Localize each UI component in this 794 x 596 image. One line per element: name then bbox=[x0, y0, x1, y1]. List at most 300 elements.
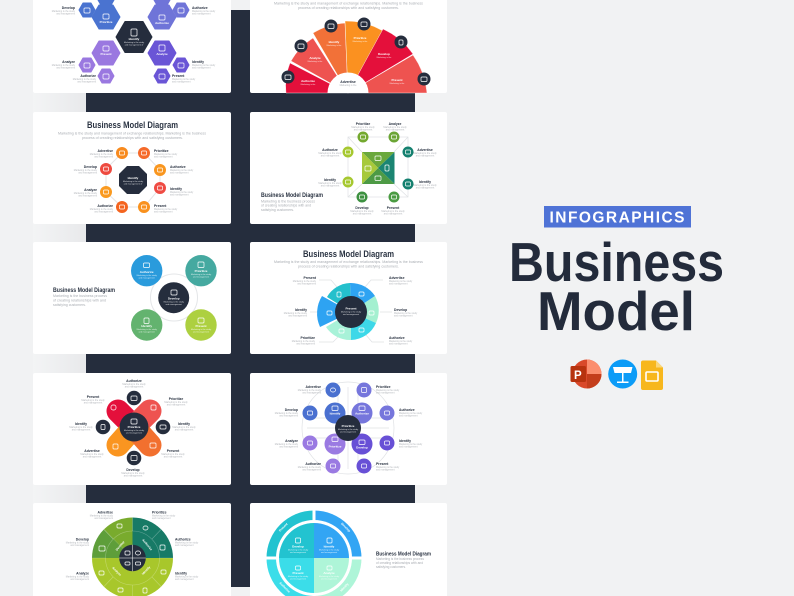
octagon labels: Marketing is the study bbox=[90, 153, 114, 156]
description: Marketing is the study and management of exchange relationships. Marketing is the business bbox=[58, 132, 206, 136]
square nodes bbox=[342, 132, 414, 202]
octagon labels: Advertise bbox=[98, 149, 113, 153]
petals bbox=[111, 405, 156, 449]
octagon labels bbox=[74, 149, 194, 214]
square labels: Marketing is the study bbox=[381, 210, 405, 213]
square labels: Advertise bbox=[417, 148, 433, 152]
petal labels: Marketing is the study bbox=[121, 472, 145, 475]
square labels: Present bbox=[387, 206, 400, 210]
wheel labels: Marketing is the study bbox=[66, 576, 90, 578]
outer ring quadrants: Present bbox=[278, 522, 289, 533]
petal labels: Develop bbox=[126, 468, 140, 472]
green square bbox=[362, 152, 394, 184]
petal centre: and management bbox=[126, 432, 143, 434]
fan labels: Marketing is the bbox=[308, 60, 323, 63]
network labels: Marketing is the study bbox=[399, 443, 423, 446]
network labels: Analyze bbox=[285, 439, 298, 443]
octagon nodes bbox=[100, 147, 166, 213]
wheel: Identify bbox=[141, 565, 151, 576]
square labels bbox=[318, 122, 437, 216]
petal centre: Prioritize bbox=[128, 425, 141, 429]
heading and description: satisfying customers. bbox=[261, 208, 294, 212]
octagon labels: and management bbox=[170, 172, 189, 174]
fan segments bbox=[286, 21, 427, 93]
octagon labels: Identify bbox=[170, 187, 182, 191]
wheel labels: Marketing is the study bbox=[152, 514, 176, 518]
heading and description: satisfying customers. bbox=[53, 303, 86, 307]
square labels: Marketing is the study bbox=[413, 184, 437, 187]
heading: Business Model Diagram bbox=[87, 120, 178, 130]
outer nodes bbox=[302, 382, 394, 474]
network labels: Marketing is the study bbox=[376, 466, 400, 469]
fan centre bbox=[327, 72, 368, 93]
wheel labels: and management bbox=[94, 517, 113, 520]
network labels: Present bbox=[376, 462, 389, 466]
inner quadrants bbox=[279, 523, 349, 593]
ring labels: and management bbox=[297, 282, 316, 286]
network centre: Marketing is the study bbox=[338, 428, 359, 431]
octagon labels: and management bbox=[170, 194, 189, 196]
inner quadrants: Marketing is the study bbox=[319, 575, 340, 578]
heading and description: of creating relationships with and bbox=[53, 298, 106, 302]
ring labels: and management bbox=[288, 314, 307, 318]
inner quadrants: and management bbox=[290, 578, 307, 580]
outer ring quadrants bbox=[262, 505, 366, 596]
square labels: Identify bbox=[324, 178, 336, 182]
circles: Prioritize bbox=[195, 269, 208, 273]
petal labels: and management bbox=[167, 404, 186, 406]
fan description: process of creating relationships with and satisfying customers. bbox=[298, 6, 399, 10]
hexagon labels: Identify bbox=[192, 60, 204, 64]
network labels: and management bbox=[279, 446, 298, 448]
wheel labels: and management bbox=[70, 578, 89, 581]
square labels: Marketing is the study bbox=[383, 126, 407, 129]
hexagon labels bbox=[52, 6, 216, 84]
ring labels: Marketing is the study bbox=[389, 340, 413, 343]
wheel: Develop bbox=[115, 540, 125, 552]
inner quadrants: Present bbox=[292, 571, 304, 575]
network labels: and management bbox=[302, 392, 321, 394]
network labels: Marketing is the study bbox=[275, 443, 299, 446]
ring labels bbox=[284, 276, 418, 346]
circles: and management bbox=[193, 276, 210, 278]
title: Business bbox=[509, 231, 724, 293]
circles: Marketing is the study bbox=[137, 328, 158, 331]
hexagon cluster: Authorize bbox=[155, 21, 169, 25]
badge: infographics: INFOGRAPHICS bbox=[550, 210, 684, 226]
ring labels: Present bbox=[304, 276, 317, 280]
heading and description bbox=[261, 192, 323, 212]
hexagon labels: Marketing is the study bbox=[52, 64, 76, 67]
wheel labels: Advertise bbox=[98, 510, 113, 514]
connectors bbox=[310, 280, 392, 342]
fan labels: Marketing is the bbox=[301, 83, 316, 86]
hexagon cluster: Present bbox=[100, 52, 112, 56]
octagon labels: Marketing is the study bbox=[90, 208, 114, 211]
network centre bbox=[335, 415, 361, 441]
square labels: Marketing is the study bbox=[413, 152, 437, 155]
wheel labels: Prioritize bbox=[152, 510, 167, 514]
network labels: Marketing is the study bbox=[376, 389, 400, 392]
hexagon labels: Analyze bbox=[62, 60, 75, 64]
heading and description: of creating relationships with and bbox=[261, 204, 311, 208]
wheel centre bbox=[119, 545, 146, 571]
hexagon cluster: Marketing is the study bbox=[124, 41, 145, 44]
network labels bbox=[275, 385, 423, 472]
petal labels: and management bbox=[84, 402, 103, 404]
network labels: and management bbox=[376, 392, 395, 394]
network centre: Prioritize bbox=[342, 424, 355, 428]
hexagon labels: and management bbox=[56, 12, 75, 16]
octagon labels: and management bbox=[154, 210, 173, 214]
octagon labels: and management bbox=[78, 172, 97, 174]
fan labels: Advertise bbox=[340, 80, 356, 84]
wheel labels: and management bbox=[175, 578, 194, 581]
square labels: and management bbox=[386, 128, 405, 132]
octagon labels: Authorize bbox=[170, 165, 186, 169]
octagon labels: Authorize bbox=[97, 204, 113, 208]
wheel: Analyze bbox=[111, 566, 122, 577]
hexagon labels: Authorize bbox=[80, 74, 96, 78]
petal labels: Marketing is the study bbox=[80, 453, 104, 456]
inner nodes: Develop bbox=[356, 446, 368, 450]
petal labels: Prioritize bbox=[169, 397, 183, 401]
icon: powerpoint: P bbox=[574, 370, 582, 382]
petal labels: Marketing is the study bbox=[122, 383, 146, 386]
octagon labels: Marketing is the study bbox=[170, 191, 194, 194]
network labels: Marketing is the study bbox=[275, 412, 299, 415]
fan description bbox=[274, 2, 423, 10]
ring labels: Marketing is the study bbox=[394, 312, 418, 315]
octagon centre: and management of bbox=[124, 182, 143, 186]
petal labels: and management bbox=[72, 428, 91, 432]
circles: and management bbox=[139, 330, 155, 334]
circles: Identify bbox=[141, 324, 152, 328]
panel: fan diagram bbox=[250, 0, 447, 93]
ring labels: Identify bbox=[295, 308, 307, 312]
heading: Business Model Diagram bbox=[303, 249, 394, 259]
petal badges bbox=[96, 391, 170, 465]
ring labels: Authorize bbox=[389, 336, 405, 340]
panel: hexagon diagram bbox=[33, 0, 231, 93]
wheel labels: Marketing is the study bbox=[66, 542, 90, 544]
dark backing panel bbox=[86, 10, 415, 587]
network centre: and management bbox=[340, 430, 357, 434]
network labels: Develop bbox=[285, 408, 298, 412]
ring labels: Marketing is the study bbox=[292, 340, 316, 343]
wheel labels: Marketing is the study bbox=[90, 514, 114, 518]
ring labels: and management bbox=[296, 342, 315, 346]
square labels: and management bbox=[416, 186, 435, 190]
hexagon labels: Marketing is the study bbox=[73, 78, 97, 81]
circles: Marketing is the study bbox=[191, 273, 212, 276]
ring labels: Marketing is the study bbox=[284, 312, 308, 315]
network labels: Prioritize bbox=[376, 385, 391, 389]
inner quadrants: Marketing is the study bbox=[288, 575, 309, 578]
petal labels: Marketing is the study bbox=[81, 399, 105, 402]
petal labels: Marketing is the study bbox=[172, 426, 196, 429]
ring labels: Prioritize bbox=[300, 336, 315, 340]
heading and description: Marketing is the business process bbox=[261, 200, 315, 204]
frame lines bbox=[348, 137, 408, 197]
square labels: Marketing is the study bbox=[318, 152, 342, 155]
fan labels: Prioritize bbox=[354, 36, 367, 40]
title: Model bbox=[537, 280, 695, 342]
octagon labels: Prioritize bbox=[154, 149, 169, 153]
octagon labels: Analyze bbox=[84, 188, 97, 192]
fan labels: Present bbox=[391, 78, 403, 82]
octagon ring bbox=[106, 153, 160, 207]
square labels: Authorize bbox=[322, 148, 338, 152]
network labels: and management bbox=[399, 414, 418, 418]
square labels: Marketing is the study bbox=[318, 182, 342, 185]
inner quadrants: and management bbox=[321, 551, 338, 554]
circles: Marketing is the study bbox=[164, 300, 185, 304]
wheel labels: and management bbox=[175, 544, 194, 547]
hexagon cluster: Identify bbox=[129, 37, 140, 41]
network labels: and management bbox=[279, 414, 298, 418]
petal labels: and management bbox=[83, 456, 102, 458]
inner quadrants: Analyze bbox=[323, 571, 335, 575]
petal labels: and management bbox=[125, 386, 144, 388]
panel: quadrant ring diagram bbox=[250, 503, 447, 596]
circles: Develop bbox=[168, 296, 180, 300]
hexagon labels: and management bbox=[77, 80, 96, 84]
description: process of creating relationships with and satisfying customers. bbox=[82, 136, 183, 140]
inner quadrants: and management bbox=[321, 578, 338, 580]
fan labels: Marketing is the bbox=[327, 44, 342, 47]
petal labels: Marketing is the study bbox=[69, 426, 93, 429]
panel: segmented ring diagram bbox=[250, 242, 447, 354]
outer ring quadrants: Authorize bbox=[278, 581, 291, 594]
icon: powerpoint bbox=[570, 360, 602, 388]
inner quadrants: Identify bbox=[324, 544, 335, 548]
inner quadrants: Marketing is the study bbox=[319, 548, 340, 552]
fan description: Marketing is the study and management of exchange relationships. Marketing is the business bbox=[274, 2, 423, 6]
square labels: Analyze bbox=[389, 122, 402, 126]
octagon labels: Marketing is the study bbox=[170, 169, 194, 172]
fan labels: Develop bbox=[378, 52, 390, 56]
icon: google slides bbox=[641, 360, 663, 390]
octagon labels: and management bbox=[94, 210, 113, 214]
inner quadrants: and management bbox=[290, 551, 307, 554]
network labels: and management bbox=[399, 446, 418, 448]
wheel bbox=[92, 518, 173, 596]
fan labels: Identify bbox=[329, 40, 340, 44]
inner quadrants: Marketing is the study bbox=[288, 548, 309, 552]
octagon labels: Marketing is the study bbox=[154, 153, 178, 156]
wheel labels: Analyze bbox=[76, 572, 89, 576]
wheel labels: and management bbox=[152, 517, 171, 520]
fan labels bbox=[301, 36, 405, 87]
heading and description: Business Model Diagram bbox=[53, 287, 115, 294]
hexagon cluster: and management of bbox=[125, 44, 144, 46]
octagon centre: Marketing is the study bbox=[123, 180, 144, 183]
petal labels: Identify bbox=[75, 422, 87, 426]
panel: circles diagram bbox=[33, 242, 231, 354]
petal labels: and management bbox=[175, 428, 194, 432]
square labels: and management bbox=[354, 128, 373, 132]
wheel: Authorize bbox=[141, 538, 153, 551]
ring centre: Marketing is the study bbox=[341, 310, 362, 314]
wheel labels: and management bbox=[70, 544, 89, 547]
hexagon labels: and management bbox=[56, 66, 75, 70]
octagon centre: Identify bbox=[128, 176, 139, 180]
ring centre: Present bbox=[345, 306, 357, 310]
ring segments bbox=[317, 283, 379, 340]
hexagon labels: Marketing is the study bbox=[192, 64, 216, 67]
heading and description: Marketing is the business process bbox=[376, 557, 424, 561]
outer ring quadrants: Identify bbox=[339, 582, 350, 592]
square labels: Prioritize bbox=[356, 122, 370, 126]
circles: Marketing is the study bbox=[191, 328, 212, 331]
hexagon cluster: Analyze bbox=[156, 52, 168, 56]
square labels: and management bbox=[321, 184, 340, 188]
panel: octagon diagram bbox=[33, 112, 231, 224]
ring labels: Develop bbox=[394, 308, 407, 312]
petal labels: Present bbox=[87, 395, 100, 399]
petal labels: Advertise bbox=[84, 449, 100, 453]
network labels: Marketing is the study bbox=[399, 412, 423, 415]
square labels: and management bbox=[384, 212, 403, 216]
octagon labels: Marketing is the study bbox=[74, 192, 98, 195]
square labels: Identify bbox=[419, 180, 431, 184]
heading and description bbox=[376, 552, 431, 569]
network labels: Authorize bbox=[399, 408, 415, 412]
square labels: and management bbox=[353, 212, 372, 216]
circles bbox=[131, 255, 217, 341]
square labels: Develop bbox=[355, 206, 369, 210]
inner nodes: Authorize bbox=[355, 412, 369, 416]
hexagon labels: Present bbox=[172, 74, 185, 78]
network labels: and management bbox=[302, 468, 321, 472]
octagon labels: and management bbox=[78, 194, 97, 198]
ring labels: and management bbox=[389, 282, 408, 286]
description: process of creating relationships with and satisfying customers. bbox=[298, 264, 399, 268]
heading and description: Marketing is the business process bbox=[53, 294, 107, 298]
octagon labels: Marketing is the study bbox=[74, 169, 98, 172]
hexagon labels: Authorize bbox=[192, 6, 208, 10]
title bbox=[509, 231, 724, 342]
wheel labels: Develop bbox=[76, 538, 89, 542]
octagon labels: and management bbox=[154, 156, 173, 158]
panel: square diagram bbox=[250, 112, 447, 224]
description: Marketing is the study and management of exchange relationships. Marketing is the business bbox=[274, 260, 423, 264]
square labels: and management bbox=[416, 154, 435, 158]
petal centre bbox=[120, 412, 148, 442]
heading and description: satisfying customers. bbox=[376, 565, 406, 569]
petal labels: and management bbox=[164, 456, 183, 458]
heading and description: of creating relationships with and bbox=[376, 561, 423, 565]
network lines bbox=[302, 382, 394, 474]
hexagon labels: and management bbox=[192, 12, 211, 16]
panel: green wheel diagram bbox=[33, 503, 231, 596]
hexagon labels: and management bbox=[172, 80, 191, 84]
ring labels: and management bbox=[394, 314, 413, 318]
hexagon cluster: Prioritize bbox=[100, 20, 113, 24]
inner quadrants: Develop bbox=[292, 544, 304, 548]
network labels: Marketing is the study bbox=[298, 466, 322, 469]
fan labels: Authorize bbox=[301, 79, 315, 83]
wheel labels: Marketing is the study bbox=[175, 542, 199, 544]
circles: and management bbox=[139, 276, 155, 280]
ring bbox=[150, 274, 198, 321]
petal labels: and management bbox=[124, 474, 143, 478]
inner nodes bbox=[324, 402, 372, 454]
octagon labels: Develop bbox=[84, 165, 97, 169]
hexagon labels: Marketing is the study bbox=[172, 78, 196, 81]
hexagon labels: Marketing is the study bbox=[52, 10, 76, 13]
ring labels: Advertise bbox=[389, 276, 405, 280]
fan badges bbox=[282, 18, 430, 86]
hexagon labels: Marketing is the study bbox=[192, 10, 216, 13]
petal labels bbox=[69, 379, 196, 478]
square labels: Marketing is the study bbox=[350, 210, 374, 213]
ring centre bbox=[335, 296, 367, 328]
ring labels: and management bbox=[389, 342, 408, 346]
circles: and management bbox=[193, 330, 210, 334]
network labels: Identify bbox=[399, 439, 411, 443]
square labels: Marketing is the study bbox=[351, 126, 375, 129]
fan labels: Marketing is the bbox=[390, 82, 405, 85]
petal labels: Marketing is the study bbox=[161, 453, 185, 456]
heading and description bbox=[53, 287, 115, 307]
wheel labels: Marketing is the study bbox=[175, 576, 199, 578]
fan labels: Marketing is the bbox=[340, 84, 357, 87]
fan labels: Marketing is the bbox=[353, 40, 368, 43]
network labels: Advertise bbox=[306, 385, 321, 389]
network labels: Authorize bbox=[305, 462, 321, 466]
circles: and management bbox=[166, 303, 182, 306]
petal labels: Marketing is the study bbox=[164, 401, 188, 404]
ring centre: and management bbox=[343, 313, 360, 316]
petal labels: Present bbox=[167, 449, 180, 453]
description bbox=[58, 132, 206, 140]
octagon labels: Marketing is the study bbox=[154, 208, 178, 211]
circles: Marketing is the study bbox=[137, 274, 158, 277]
inner nodes: Identify bbox=[330, 412, 341, 416]
network labels: and management bbox=[376, 468, 395, 472]
circles: Authorize bbox=[140, 270, 154, 274]
fan labels: Analyze bbox=[309, 56, 321, 60]
hexagon cluster bbox=[79, 0, 189, 83]
circles: Present bbox=[195, 324, 207, 328]
wheel labels: Identify bbox=[175, 572, 187, 576]
inner nodes: Prioritize bbox=[329, 444, 342, 448]
ring labels: Marketing is the study bbox=[293, 280, 317, 283]
outer ring quadrants: Develop bbox=[340, 522, 351, 533]
description bbox=[274, 260, 423, 268]
panel: petal diagram bbox=[33, 373, 231, 485]
heading and description: Business Model Diagram bbox=[261, 192, 323, 199]
octagon labels: Present bbox=[154, 204, 167, 208]
wheel labels bbox=[66, 510, 199, 581]
heading and description: Business Model Diagram bbox=[376, 552, 431, 558]
panel: network diagram bbox=[250, 373, 447, 485]
petal labels: Identify bbox=[178, 422, 190, 426]
wheel labels: Authorize bbox=[175, 538, 191, 542]
network labels: Marketing is the study bbox=[298, 389, 322, 392]
petal centre: Marketing is the study bbox=[124, 429, 145, 432]
hexagon labels: and management bbox=[192, 66, 211, 70]
icon: keynote bbox=[608, 360, 637, 388]
petal labels: Authorize bbox=[126, 379, 142, 383]
fan labels: Marketing is the bbox=[377, 56, 392, 59]
octagon centre bbox=[119, 166, 147, 194]
ring labels: Marketing is the study bbox=[389, 280, 413, 283]
octagon labels: and management bbox=[94, 156, 113, 158]
hexagon labels: Develop bbox=[62, 6, 75, 10]
